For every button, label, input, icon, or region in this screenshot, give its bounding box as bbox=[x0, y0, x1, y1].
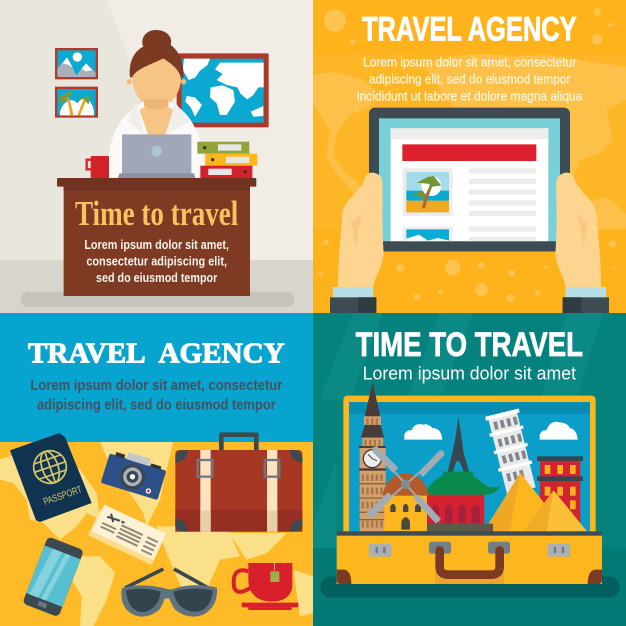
body text: incididunt ut labore et dolore magna aliqua bbox=[357, 88, 583, 103]
desk body text bbox=[84, 238, 229, 285]
windmill bbox=[366, 446, 445, 531]
icon: suitcase bbox=[175, 435, 302, 532]
subheading: Lorem ipsum dolor sit amet bbox=[363, 363, 576, 384]
right hand bbox=[555, 173, 609, 313]
desk body text: Lorem ipsum dolor sit amet, bbox=[84, 238, 229, 252]
red building bbox=[537, 456, 583, 531]
heading: TRAVEL AGENCY bbox=[28, 338, 285, 369]
desk body text: sed do eiusmod tempor bbox=[96, 271, 217, 285]
left hand bbox=[330, 173, 384, 313]
faded world map bbox=[313, 53, 626, 230]
body text bbox=[357, 55, 583, 103]
icon: palm picture bbox=[55, 87, 98, 118]
icon: laptop bbox=[118, 134, 195, 178]
icon: smartphone bbox=[22, 536, 84, 617]
desk body text: consectetur adipiscing elit, bbox=[86, 255, 227, 269]
stacked folders bbox=[197, 142, 257, 178]
body text: Lorem ipsum dolor sit amet, consectetur bbox=[30, 378, 283, 394]
panel: office desk banner bbox=[0, 0, 313, 313]
clouds bbox=[404, 422, 578, 440]
icon: mountain picture bbox=[55, 48, 98, 79]
world map on yellow bbox=[0, 442, 313, 626]
icon: passport bbox=[10, 433, 92, 522]
body text: adipiscing elit, sed do eiusmod tempor bbox=[37, 398, 276, 414]
leaning tower bbox=[485, 409, 538, 495]
beach photo bbox=[403, 168, 453, 216]
desk heading: Time to travel bbox=[75, 194, 238, 233]
world map on wall bbox=[177, 53, 269, 127]
icon: passport: PASSPORT bbox=[42, 484, 84, 508]
icon: sunglasses bbox=[121, 569, 217, 617]
figure: travel agent bbox=[107, 30, 205, 177]
icon: camera bbox=[101, 447, 168, 500]
icon: red mug bbox=[87, 156, 109, 178]
body text: adipiscing elit, sed do eiusmod tempor bbox=[369, 72, 571, 87]
pyramids bbox=[484, 473, 587, 531]
icon: boarding pass bbox=[88, 504, 166, 565]
tablet bbox=[369, 108, 570, 251]
body text: Lorem ipsum dolor sit amet, consectetur bbox=[363, 55, 577, 70]
suitcase lid bbox=[343, 396, 596, 536]
panel: open suitcase banner bbox=[313, 313, 626, 626]
bubbles bbox=[318, 8, 616, 302]
body text bbox=[30, 378, 283, 414]
icon: tea cup bbox=[234, 562, 298, 610]
chinese temple bbox=[425, 472, 500, 532]
eiffel tower bbox=[448, 417, 469, 472]
panel: travel items banner bbox=[0, 313, 313, 626]
clock tower bbox=[359, 382, 386, 531]
desk bbox=[57, 178, 256, 296]
panel: tablet banner bbox=[313, 0, 626, 313]
suitcase base bbox=[337, 531, 602, 584]
